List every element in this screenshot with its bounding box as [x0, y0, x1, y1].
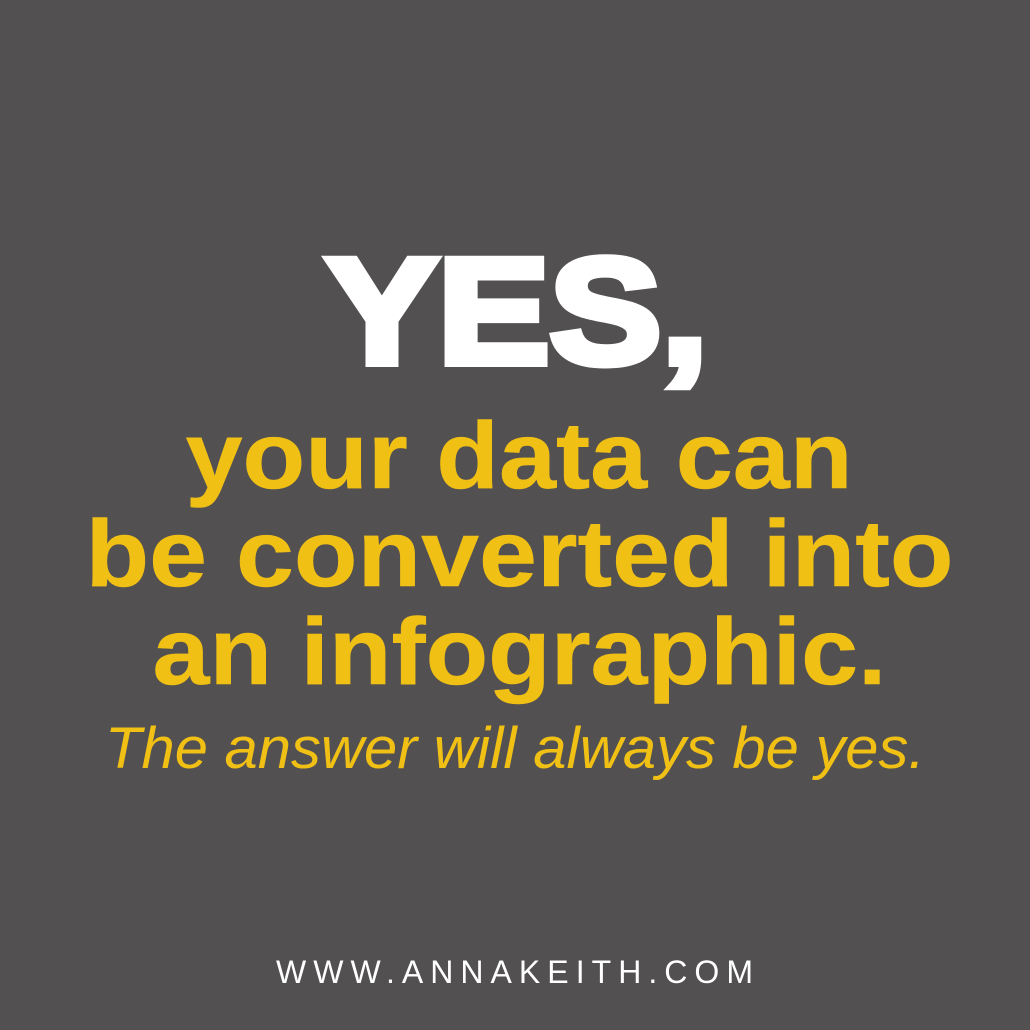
subheading: your data can be converted into an infographic — [86, 403, 953, 705]
website footer: WWW.ANNAKEITH.COM — [276, 954, 753, 990]
subheading: your data can be converted into an infographic: your data can — [186, 403, 852, 509]
headline: YES: YES, — [326, 227, 708, 395]
subheading: your data can be converted into an infographic: an infographic. — [152, 599, 886, 705]
tagline: The answer will always be yes. — [105, 716, 925, 781]
subheading: your data can be converted into an infographic: be converted into — [86, 501, 953, 607]
